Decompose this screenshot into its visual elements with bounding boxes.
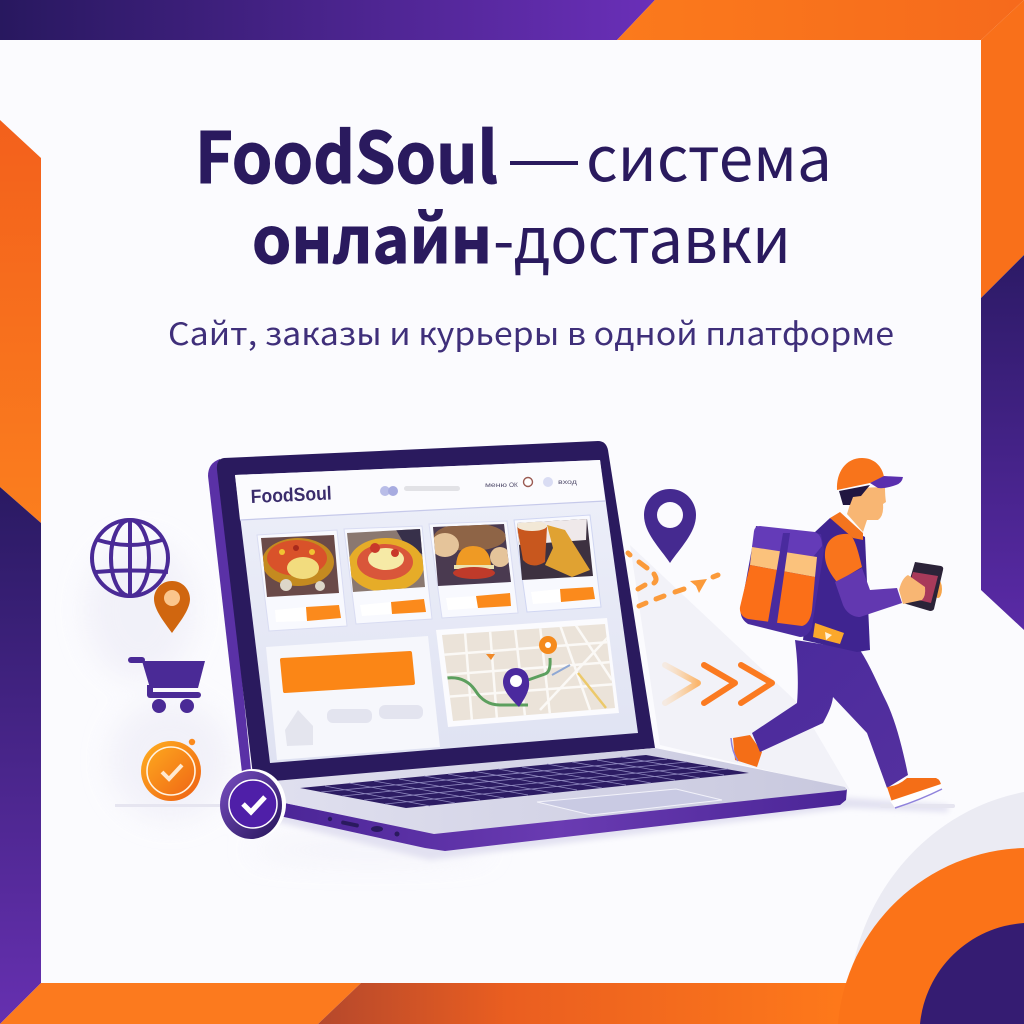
courier: pouch [813, 623, 844, 644]
title: -доставки [493, 190, 791, 282]
laptop [208, 441, 655, 790]
header menu: вход [558, 479, 577, 486]
icon: purple location pin [644, 489, 696, 563]
courier: legs [752, 640, 908, 788]
ground shadow under laptop [270, 798, 948, 860]
map pin purple [503, 668, 529, 707]
title: FoodSoul [195, 103, 498, 204]
laptop: screen [235, 460, 638, 763]
title: система [586, 109, 832, 199]
courier: hair [839, 485, 870, 505]
laptop base [262, 748, 847, 851]
site logo: FoodSoul [250, 483, 332, 508]
dashed route arrows [628, 553, 718, 606]
food card 4 [514, 515, 601, 612]
title: онлайн [252, 190, 492, 282]
search bar [380, 486, 460, 496]
header menu [485, 477, 577, 489]
subtitle: Сайт, заказы и курьеры в одной платформе [168, 309, 894, 354]
courier: hand [899, 575, 925, 604]
delivery map [436, 618, 619, 727]
courier: collar [830, 512, 863, 540]
courier: lower sleeve [835, 568, 902, 617]
food card 3 [429, 521, 518, 618]
icon: orange location pin [154, 581, 190, 633]
laptop: keyboard [300, 755, 749, 808]
courier: ground shadow [880, 804, 955, 808]
light beam behind courier [630, 545, 850, 790]
courier: upper sleeve [825, 534, 862, 582]
check badge [220, 769, 286, 839]
soft background shadows [85, 540, 490, 860]
food card 2 [344, 526, 432, 624]
ground shadow left [115, 804, 235, 807]
laptop: deck [262, 748, 847, 834]
courier: tablet [903, 562, 943, 611]
courier [731, 458, 955, 808]
food card 1 [257, 530, 347, 631]
chevron arrows [665, 665, 772, 703]
icon: timer check [141, 739, 201, 801]
icon: globe [92, 520, 168, 596]
laptop: front edge [270, 789, 847, 851]
header menu: меню [485, 482, 507, 489]
map pin orange [539, 636, 557, 654]
title [195, 103, 832, 282]
laptop: trackpad [537, 789, 722, 815]
courier: cap [837, 458, 903, 490]
laptop: lid edge [208, 459, 253, 790]
laptop: site header [235, 460, 605, 520]
courier: front shoe [887, 778, 942, 808]
courier: vest [803, 518, 870, 652]
corner arcs [838, 792, 1024, 1024]
courier: backpack [740, 526, 824, 637]
laptop: ports [328, 817, 400, 836]
icon: shopping cart [128, 657, 205, 713]
map marker small [486, 654, 495, 660]
courier: back shoe [731, 735, 762, 767]
header menu: ОК [509, 482, 518, 489]
order panel [266, 636, 440, 760]
courier: far hand [934, 580, 942, 598]
courier: face and neck [847, 487, 886, 532]
laptop: lid bezel [217, 441, 655, 784]
